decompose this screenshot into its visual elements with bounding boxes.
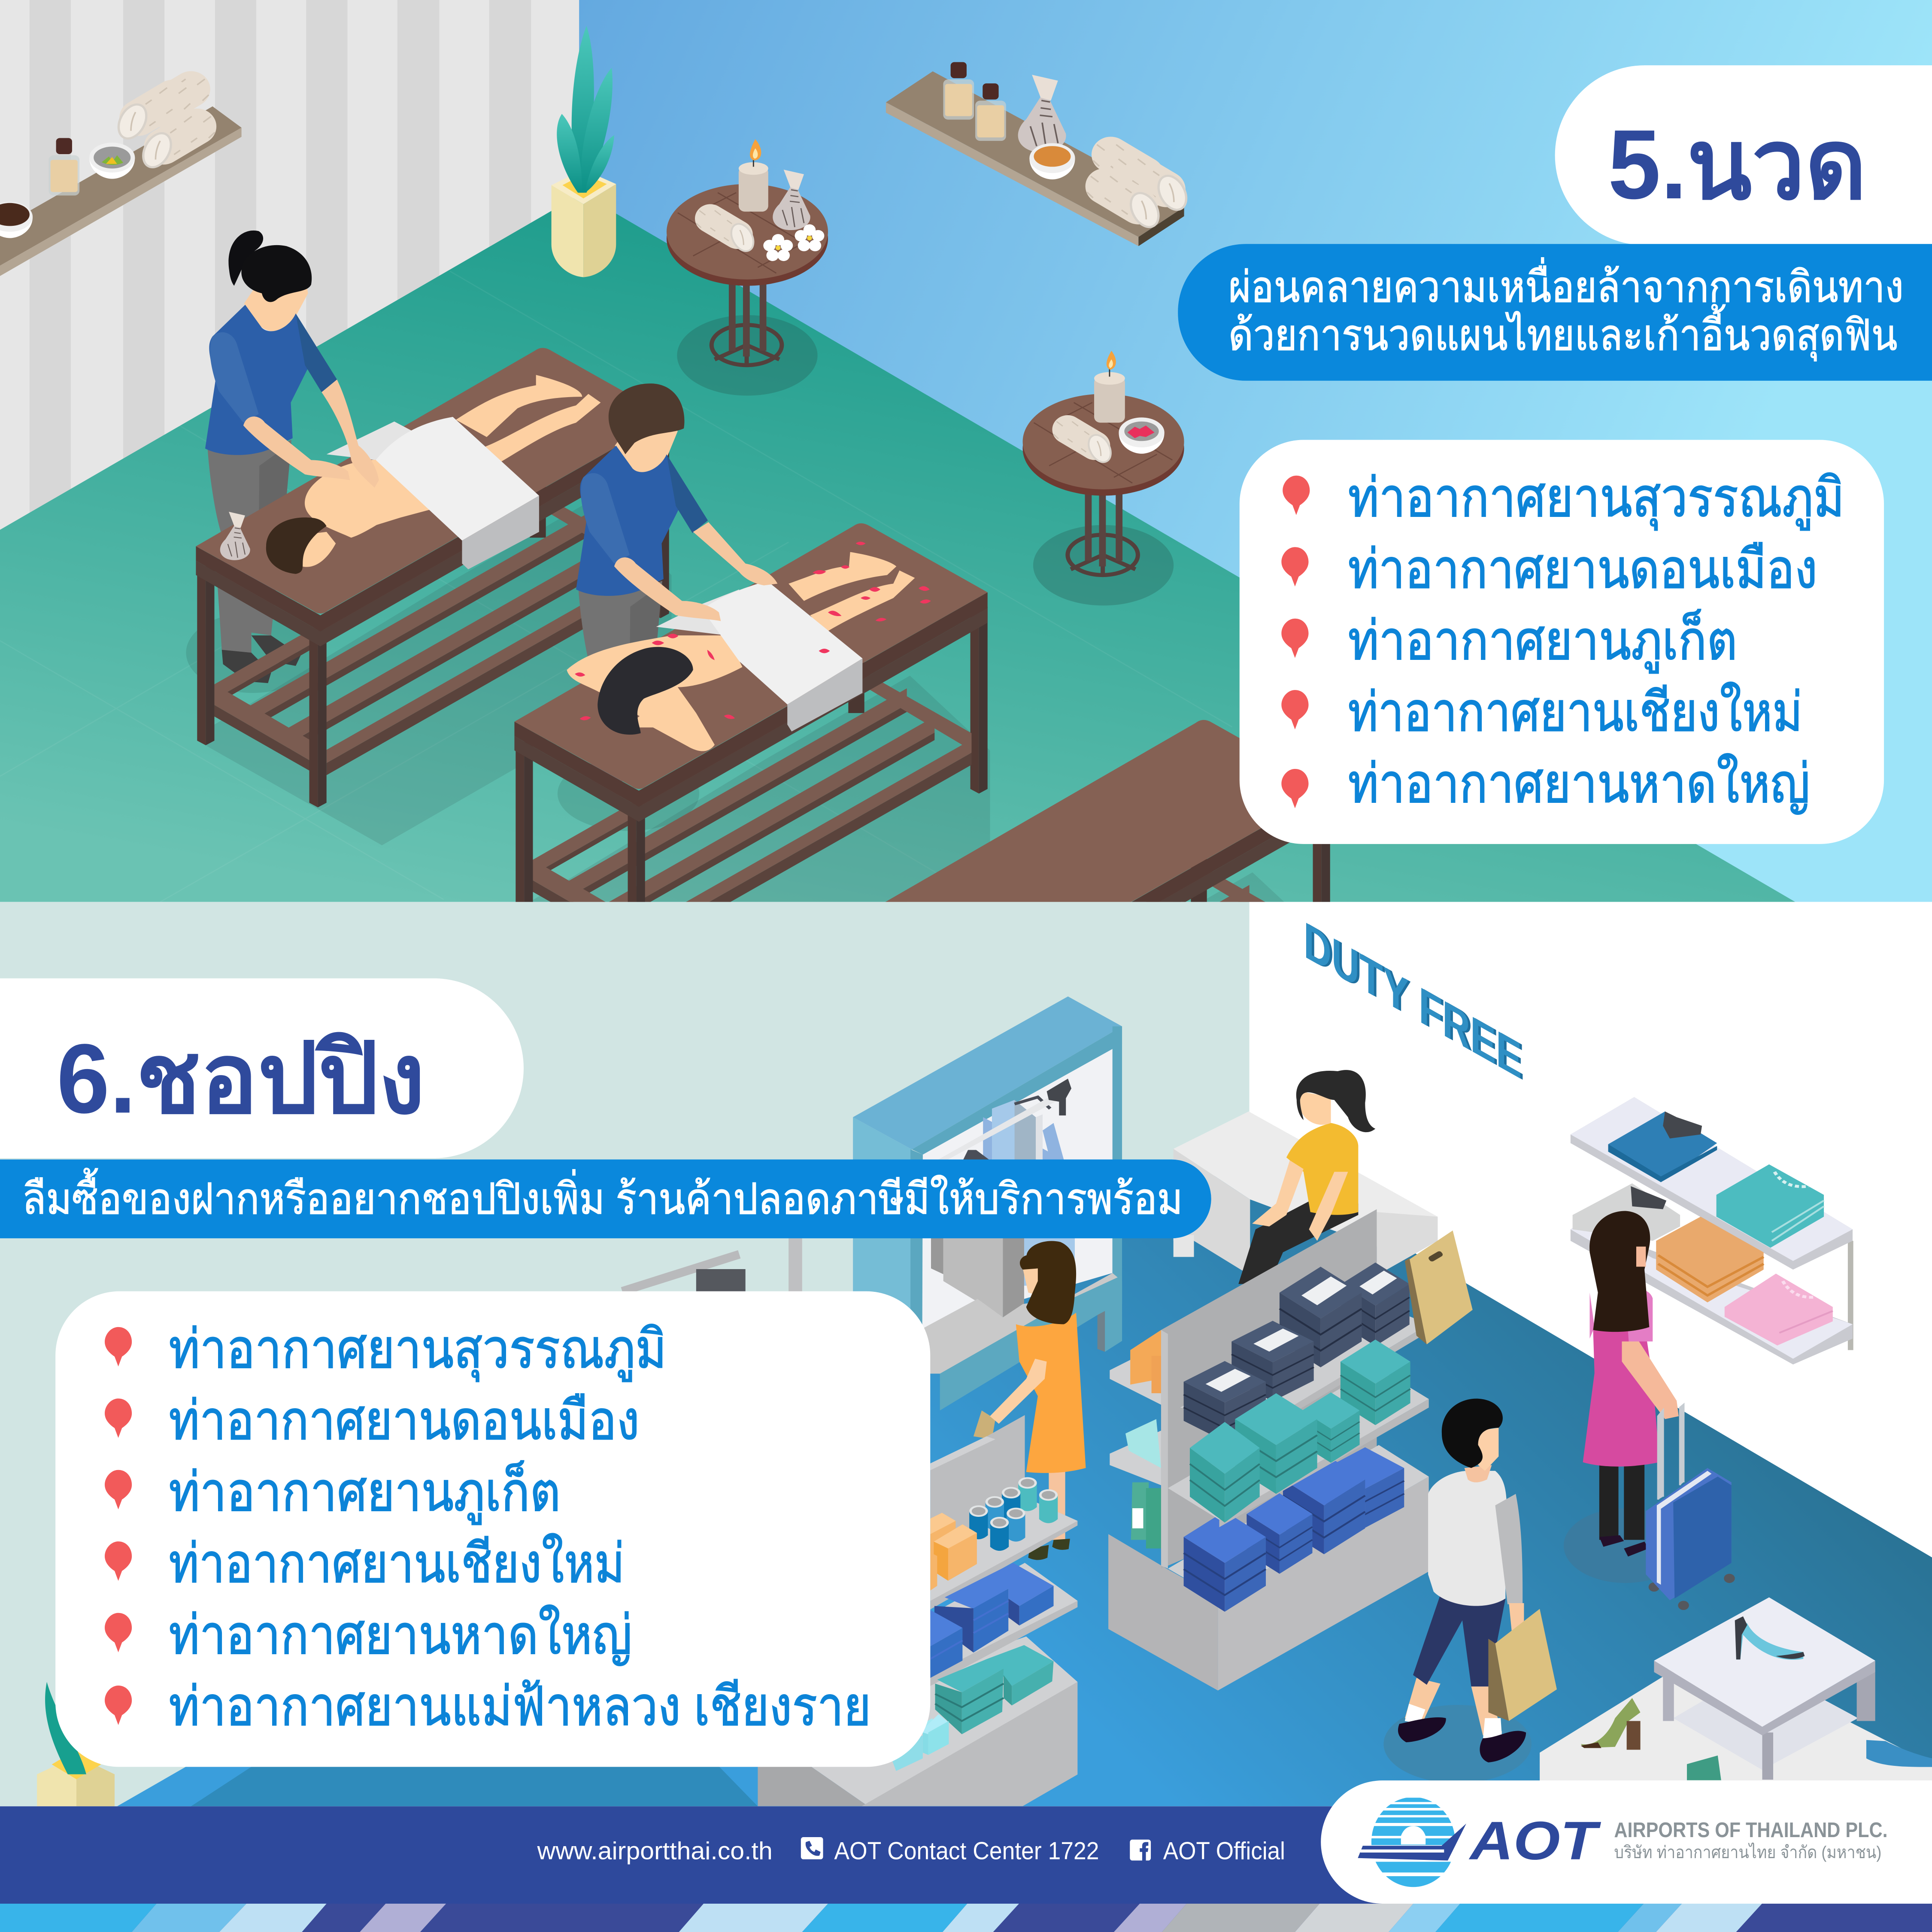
bottom left plant xyxy=(37,1682,115,1806)
second side table with candle xyxy=(1023,351,1184,605)
top shelf with jars and towels xyxy=(886,62,1192,246)
therapist 1 body xyxy=(186,231,337,693)
wall shelf with towels and bowls xyxy=(0,79,242,276)
duty free sign: DUTY FREE xyxy=(1306,911,1524,1091)
pin icon xyxy=(105,1327,132,1367)
blue stacks xyxy=(930,1563,1054,1678)
massage table 1 xyxy=(196,348,671,845)
cyan boxes xyxy=(889,1714,949,1771)
pin icon xyxy=(105,1613,132,1653)
contact center: AOT Contact Center 1722 xyxy=(834,1838,1099,1865)
plant pot xyxy=(552,26,616,277)
striped wall xyxy=(0,0,579,542)
footer bar xyxy=(0,1806,1932,1905)
airport name: ท่าอากาศยานดอนเมือง xyxy=(1348,539,1817,599)
logo pill xyxy=(1321,1780,1932,1904)
pin icon xyxy=(1283,476,1310,515)
massage table 2 xyxy=(514,523,990,1021)
rack above list panel xyxy=(622,1238,802,1300)
section background: massage room xyxy=(0,0,1932,902)
side table with candle xyxy=(667,139,828,395)
therapist 2 body xyxy=(558,383,708,831)
orange boxes xyxy=(930,1513,977,1590)
airport name: ท่าอากาศยานดอนเมือง xyxy=(169,1390,640,1451)
sky blue wall xyxy=(0,0,1932,902)
facebook name: AOT Official xyxy=(1163,1838,1285,1865)
white wall xyxy=(1250,902,1932,1806)
woman in orange dress xyxy=(974,1241,1086,1540)
floor shadow xyxy=(191,1762,758,1806)
description bar xyxy=(1178,244,1932,381)
client 2 with petals xyxy=(567,542,931,751)
hanging shirts xyxy=(938,1078,1071,1160)
seated woman in yellow xyxy=(1238,1070,1375,1284)
central display shelving xyxy=(1108,1209,1429,1691)
description bar xyxy=(0,1160,1211,1238)
airport name: ท่าอากาศยานสุวรรณภูมิ xyxy=(169,1319,667,1382)
wardrobe with hanging clothes xyxy=(853,996,1122,1476)
website: www.airportthai.co.th xyxy=(537,1838,773,1865)
teal stacks xyxy=(935,1645,1054,1734)
AOT logo mark xyxy=(1358,1798,1466,1887)
section background: duty free shop xyxy=(0,902,1932,1806)
client 1 xyxy=(220,375,601,574)
pin icon xyxy=(105,1470,132,1510)
blue flat shoe xyxy=(1866,1740,1932,1767)
shopping bag by display xyxy=(1405,1230,1473,1344)
massage scene 2 xyxy=(514,383,990,1021)
airport list panel: shopping xyxy=(55,1291,930,1767)
blue floor xyxy=(117,1156,1932,1806)
woman in pink with suitcase xyxy=(1564,1211,1735,1610)
pin icon xyxy=(105,1541,132,1581)
pin icon xyxy=(1281,547,1309,586)
shoe platform and table xyxy=(1540,1598,1932,1803)
airport name: ท่าอากาศยานภูเก็ต xyxy=(1348,609,1737,673)
cans xyxy=(969,1477,1058,1551)
pin icon xyxy=(105,1686,132,1725)
massage table 3 xyxy=(857,720,1332,1217)
seating platform xyxy=(1174,1112,1438,1276)
AOT wordmark: AOT xyxy=(1468,1810,1601,1871)
icon: facebook xyxy=(1130,1840,1151,1861)
company name english: AIRPORTS OF THAILAND PLC. xyxy=(1614,1819,1888,1842)
airport name: ท่าอากาศยานสุวรรณภูมิ xyxy=(1348,467,1844,530)
bottom colour stripes xyxy=(0,1904,1932,1932)
airport name: ท่าอากาศยานเชียงใหม่ xyxy=(1348,682,1803,742)
airport name: ท่าอากาศยานเชียงใหม่ xyxy=(169,1533,625,1594)
heading pill: 6 shopping xyxy=(0,978,524,1158)
therapist 2 arms xyxy=(614,522,777,621)
therapist 1 arms xyxy=(243,380,379,488)
pin icon xyxy=(105,1398,132,1438)
left shelf unit xyxy=(758,1415,1077,1806)
green shoe xyxy=(1687,1756,1721,1780)
duty free sign: DUTY FREE xyxy=(1304,910,1522,1090)
airport name: ท่าอากาศยานแม่ฟ้าหลวง เชียงราย xyxy=(169,1676,871,1737)
description text: ลืมซื้อของฝากหรืออยากชอปปิงเพิ่ม ร้านค้าปลอดภาษีมีให้บริการพร้อม xyxy=(22,1168,1183,1223)
wall shelves with shirts xyxy=(1571,1097,1853,1364)
icon: phone xyxy=(801,1837,823,1859)
heading pill: 5 massage xyxy=(1555,65,1932,245)
airport name: ท่าอากาศยานหาดใหญ่ xyxy=(169,1604,632,1666)
airport name: ท่าอากาศยานหาดใหญ่ xyxy=(1348,753,1810,814)
airport name: ท่าอากาศยานภูเก็ต xyxy=(169,1461,561,1525)
pin icon xyxy=(1281,619,1309,658)
man with shopping bag xyxy=(1383,1399,1557,1783)
company name thai: บริษัท ท่าอากาศยานไทย จำกัด (มหาชน) xyxy=(1614,1843,1881,1862)
massage scene 1 xyxy=(186,231,671,845)
heading text: 5.นวด xyxy=(1608,109,1867,219)
shoes under shelf xyxy=(1028,1539,1070,1560)
high heel on table xyxy=(1735,1616,1805,1660)
pin icon xyxy=(1281,690,1309,729)
pale wall xyxy=(0,902,1250,1806)
sandal xyxy=(1581,1698,1641,1750)
duty free sign xyxy=(1304,910,1524,1091)
pin icon xyxy=(1281,769,1309,808)
heading text: 6.ชอปปิง xyxy=(57,1024,425,1134)
folded jacket xyxy=(931,1237,1075,1317)
airport list panel: massage xyxy=(1240,440,1884,844)
green floor xyxy=(0,194,1795,902)
